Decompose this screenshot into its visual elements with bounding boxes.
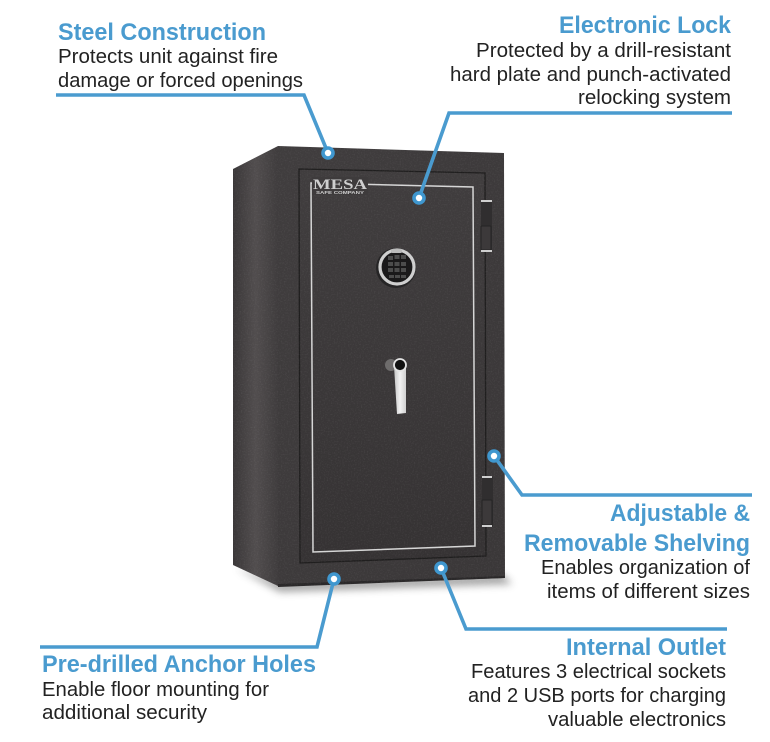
description bbox=[42, 679, 269, 724]
description: Protected by a drill-resistant bbox=[476, 40, 731, 62]
callout: anchor holes bbox=[40, 574, 339, 724]
marker dot bbox=[489, 451, 499, 461]
description bbox=[468, 661, 726, 731]
leader line bbox=[494, 456, 752, 495]
marker dot bbox=[329, 574, 339, 584]
description: Protects unit against fire bbox=[58, 46, 278, 68]
description: relocking system bbox=[578, 87, 731, 109]
callout: internal outlet bbox=[436, 563, 727, 731]
safe illustration bbox=[233, 146, 512, 592]
safe door bbox=[299, 169, 486, 563]
heading: Adjustable & bbox=[610, 500, 750, 527]
description: additional security bbox=[42, 702, 207, 724]
heading bbox=[524, 500, 750, 557]
callout: adjustable shelving bbox=[489, 451, 752, 603]
door handle bbox=[385, 359, 406, 414]
description: Enables organization of bbox=[541, 557, 750, 579]
electronic keypad bbox=[376, 248, 416, 288]
callout: electronic lock bbox=[414, 12, 732, 203]
safe side panel bbox=[233, 146, 278, 586]
brand logo: MESA bbox=[313, 177, 367, 193]
description: Features 3 electrical sockets bbox=[471, 661, 726, 683]
leader line bbox=[441, 568, 727, 629]
description: and 2 USB ports for charging bbox=[468, 685, 726, 707]
description bbox=[450, 40, 731, 109]
leader line bbox=[56, 95, 328, 153]
brand logo: SAFE COMPANY bbox=[316, 190, 364, 195]
leader line bbox=[40, 579, 334, 647]
floor shadow bbox=[236, 568, 512, 592]
heading: Internal Outlet bbox=[566, 634, 726, 661]
description bbox=[58, 46, 303, 92]
leader line bbox=[419, 113, 732, 198]
door inlay line bbox=[311, 183, 475, 552]
brand logo bbox=[312, 177, 368, 195]
marker dot bbox=[436, 563, 446, 573]
heading: Electronic Lock bbox=[559, 12, 732, 39]
description: items of different sizes bbox=[547, 581, 750, 603]
description: hard plate and punch-activated bbox=[450, 64, 731, 86]
description: Enable floor mounting for bbox=[42, 679, 269, 701]
heading: Removable Shelving bbox=[524, 530, 750, 557]
heading: Pre-drilled Anchor Holes bbox=[42, 651, 316, 678]
lower hinge bbox=[482, 476, 493, 527]
description: damage or forced openings bbox=[58, 70, 303, 92]
callout: steel construction bbox=[56, 19, 333, 158]
upper hinge bbox=[481, 200, 492, 252]
safe front frame bbox=[278, 146, 505, 586]
surface speckle texture bbox=[233, 146, 505, 586]
heading: Steel Construction bbox=[58, 19, 266, 46]
description bbox=[541, 557, 750, 603]
marker dot bbox=[414, 193, 424, 203]
marker dot bbox=[323, 148, 333, 158]
description: valuable electronics bbox=[548, 709, 726, 731]
